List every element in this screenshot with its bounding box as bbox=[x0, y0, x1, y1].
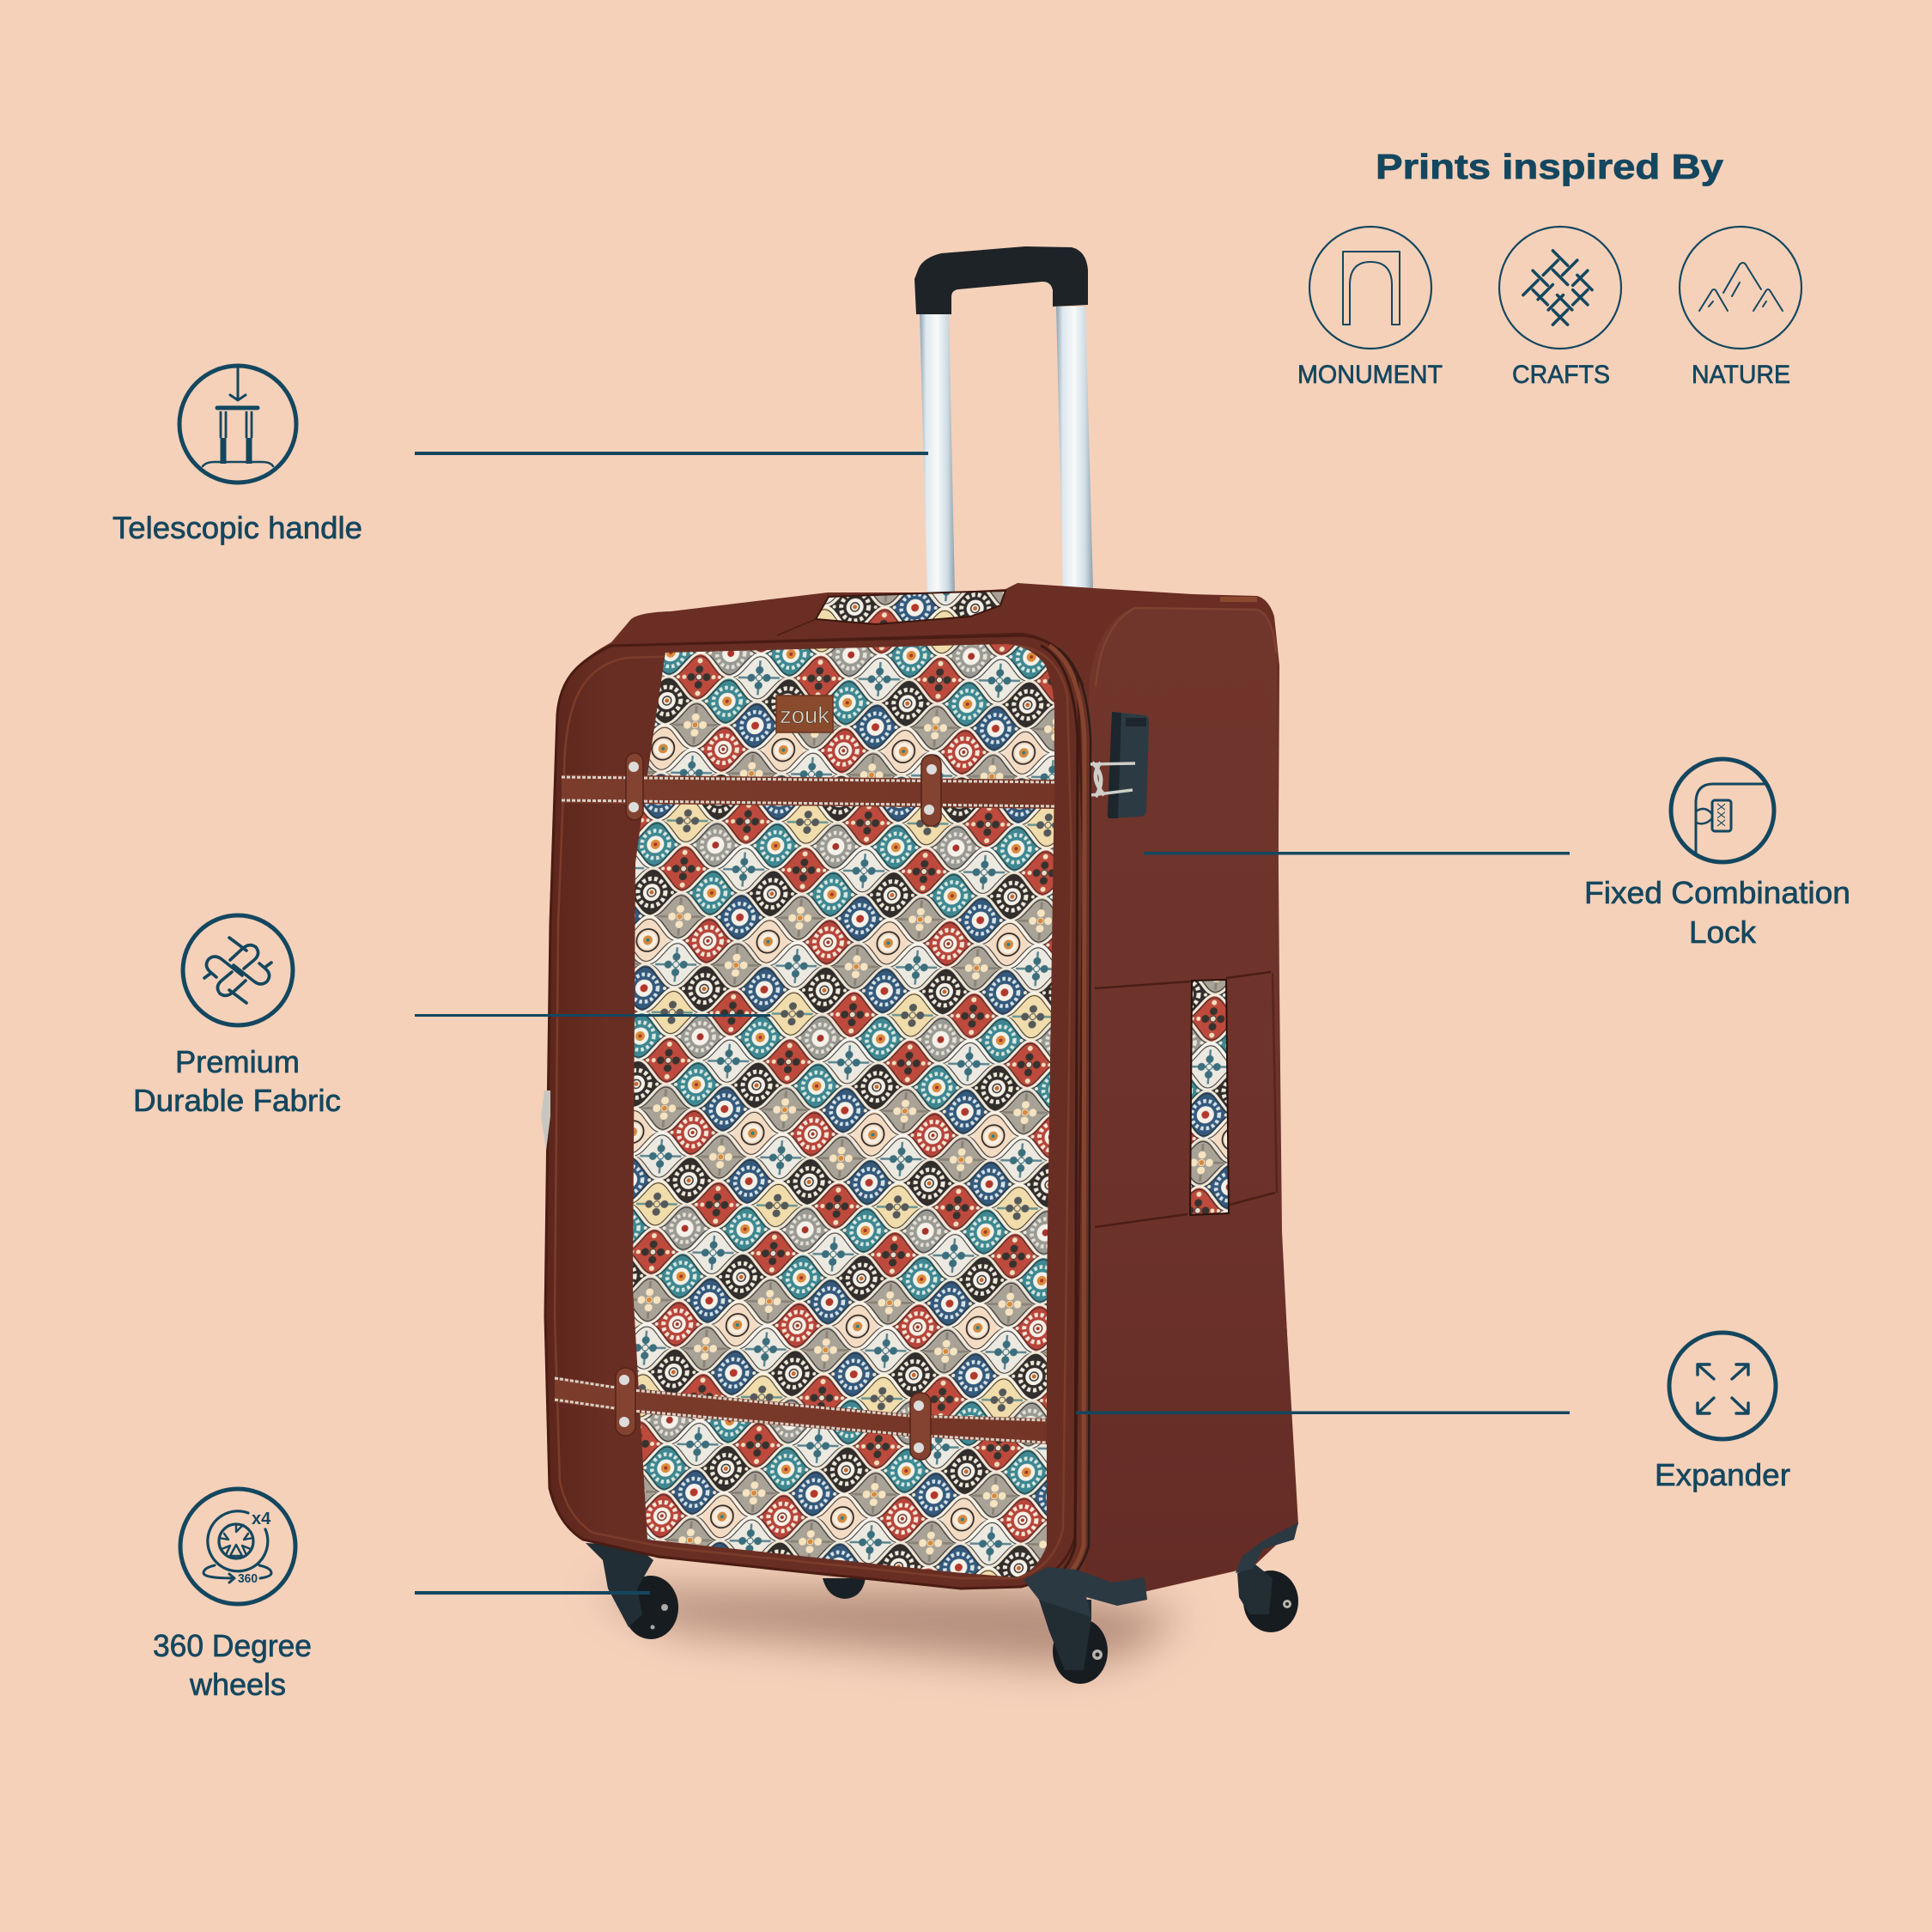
label: crafts: CRAFTS bbox=[1512, 361, 1610, 389]
label: Fixed Combination bbox=[1584, 875, 1850, 910]
label: Expander bbox=[1655, 1457, 1790, 1492]
icon: expander arrows bbox=[1669, 1333, 1776, 1439]
top face seam bbox=[611, 634, 1084, 687]
label line two: Durable Fabric bbox=[133, 1083, 341, 1118]
label line two: Lock bbox=[1689, 914, 1757, 950]
combination lock bbox=[1091, 712, 1149, 818]
label line two: wheels bbox=[189, 1667, 286, 1702]
upper strap bbox=[562, 753, 1054, 826]
top carry handle with print bbox=[816, 591, 1005, 624]
lower strap bbox=[555, 1368, 1047, 1460]
leader line bbox=[415, 1591, 650, 1595]
front corner guard bbox=[1024, 1567, 1147, 1617]
icon: handle bbox=[179, 366, 296, 483]
leader line bbox=[1144, 852, 1570, 855]
suitcase bbox=[541, 246, 1298, 1684]
callout: telescopic handle bbox=[112, 366, 928, 545]
icon: lock bbox=[1671, 759, 1774, 862]
callout: 360 degree wheels bbox=[153, 1489, 650, 1702]
label: nature: NATURE bbox=[1692, 361, 1790, 389]
icon: wheel bbox=[180, 1489, 295, 1604]
callout: fixed combination lock bbox=[1144, 759, 1850, 950]
front right wheel bbox=[1039, 1600, 1108, 1684]
icon text: 360: 360 bbox=[238, 1571, 258, 1586]
brand tag: zouk bbox=[780, 702, 829, 728]
icon text: x4: x4 bbox=[252, 1510, 271, 1528]
side panel bbox=[1085, 597, 1297, 1591]
heading: Prints inspired By bbox=[1376, 147, 1723, 186]
side handle with print bbox=[1190, 980, 1229, 1215]
callout: premium durable fabric bbox=[133, 915, 770, 1118]
icon: nature bbox=[1680, 227, 1801, 349]
label: monument: MONUMENT bbox=[1297, 361, 1443, 389]
body silhouette bbox=[545, 583, 1298, 1597]
front panel bbox=[545, 635, 1084, 1589]
icon: fabric bbox=[183, 915, 293, 1025]
callout: expander bbox=[1076, 1333, 1790, 1492]
handle grip bbox=[914, 246, 1088, 314]
front left wheel bbox=[586, 1543, 678, 1639]
telescopic handle tubes bbox=[920, 307, 1093, 592]
back right wheel bbox=[1237, 1564, 1298, 1632]
brand tag bbox=[776, 696, 833, 732]
label: Premium bbox=[175, 1044, 300, 1079]
leader line bbox=[415, 1014, 770, 1017]
left zip pull bbox=[541, 1091, 550, 1151]
label: Telescopic handle bbox=[112, 510, 362, 545]
leader line bbox=[1076, 1412, 1570, 1414]
icon: monument bbox=[1309, 227, 1431, 349]
leader line bbox=[415, 452, 928, 455]
front piping bbox=[555, 646, 1072, 1578]
icon text: xxx: XXX bbox=[1715, 803, 1728, 827]
right corner guard bbox=[1236, 1522, 1298, 1573]
expander zips bbox=[1041, 646, 1091, 1583]
label: 360 Degree bbox=[153, 1628, 312, 1663]
panel: prints inspired by bbox=[1297, 147, 1801, 389]
floor shadow bbox=[592, 1589, 1185, 1666]
icon: crafts bbox=[1499, 227, 1621, 349]
printed front panel bbox=[633, 644, 1054, 1577]
back wheel bbox=[823, 1578, 866, 1599]
